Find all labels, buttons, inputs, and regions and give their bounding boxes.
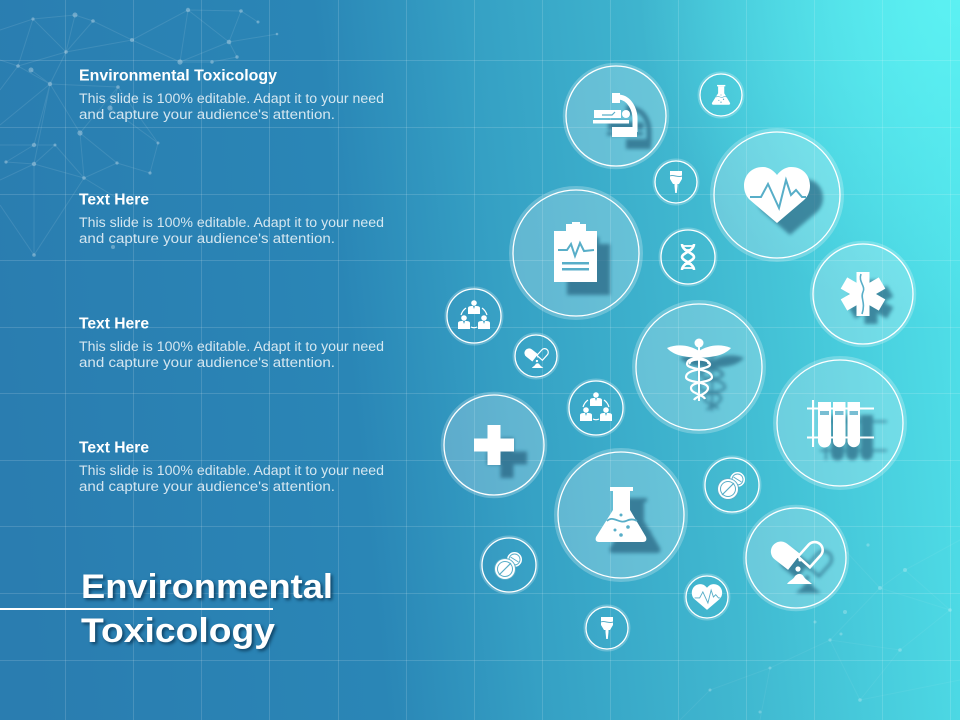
text block 4: This slide is 100% editable. Adapt it to your need xyxy=(79,463,384,478)
text block 4 xyxy=(79,440,384,494)
title: Toxicology xyxy=(81,612,275,650)
text block 2: This slide is 100% editable. Adapt it to your need xyxy=(79,215,384,230)
network pattern: bottom right xyxy=(680,540,960,720)
text block 2 xyxy=(79,192,384,246)
network pattern: top left xyxy=(0,8,278,257)
bubble: small flask xyxy=(699,73,743,117)
bubble: pills right xyxy=(704,457,760,513)
bubble: clipboard xyxy=(511,188,641,318)
text block 1: This slide is 100% editable. Adapt it to your need xyxy=(79,91,384,106)
bubble: pills lower left xyxy=(481,537,537,593)
text block 4: and capture your audience's attention. xyxy=(79,479,335,494)
bubble: DNA xyxy=(660,229,716,285)
text block 1: and capture your audience's attention. xyxy=(79,107,335,122)
text block 3 xyxy=(79,316,384,370)
bubble: scanner xyxy=(564,64,668,168)
title xyxy=(81,568,333,650)
text block 2: and capture your audience's attention. xyxy=(79,231,335,246)
bubble: team centre xyxy=(568,380,624,436)
bubble: heart xyxy=(712,130,842,260)
text block 3: This slide is 100% editable. Adapt it to your need xyxy=(79,339,384,354)
bubble: small heart xyxy=(685,575,729,619)
bubble: big flask xyxy=(556,450,686,580)
title rule xyxy=(0,608,273,610)
bubble: small capsule xyxy=(514,334,558,378)
bubble: caduceus xyxy=(634,302,764,432)
text block 4: Text Here xyxy=(79,440,149,456)
text block 1: Environmental Toxicology xyxy=(79,68,277,84)
bubble: small IV bag lower xyxy=(585,606,629,650)
bubble: test tubes xyxy=(775,358,905,488)
bubble: small IV bag xyxy=(654,160,698,204)
text block 2: Text Here xyxy=(79,192,149,208)
text block 3: and capture your audience's attention. xyxy=(79,355,335,370)
text block 3: Text Here xyxy=(79,316,149,332)
bubble: capsule xyxy=(744,506,848,610)
title: Environmental xyxy=(81,568,333,606)
bubble: star of life xyxy=(812,242,914,346)
bubble: plus xyxy=(442,394,546,496)
bubble: team left xyxy=(446,288,502,344)
text block 1 xyxy=(79,68,384,122)
